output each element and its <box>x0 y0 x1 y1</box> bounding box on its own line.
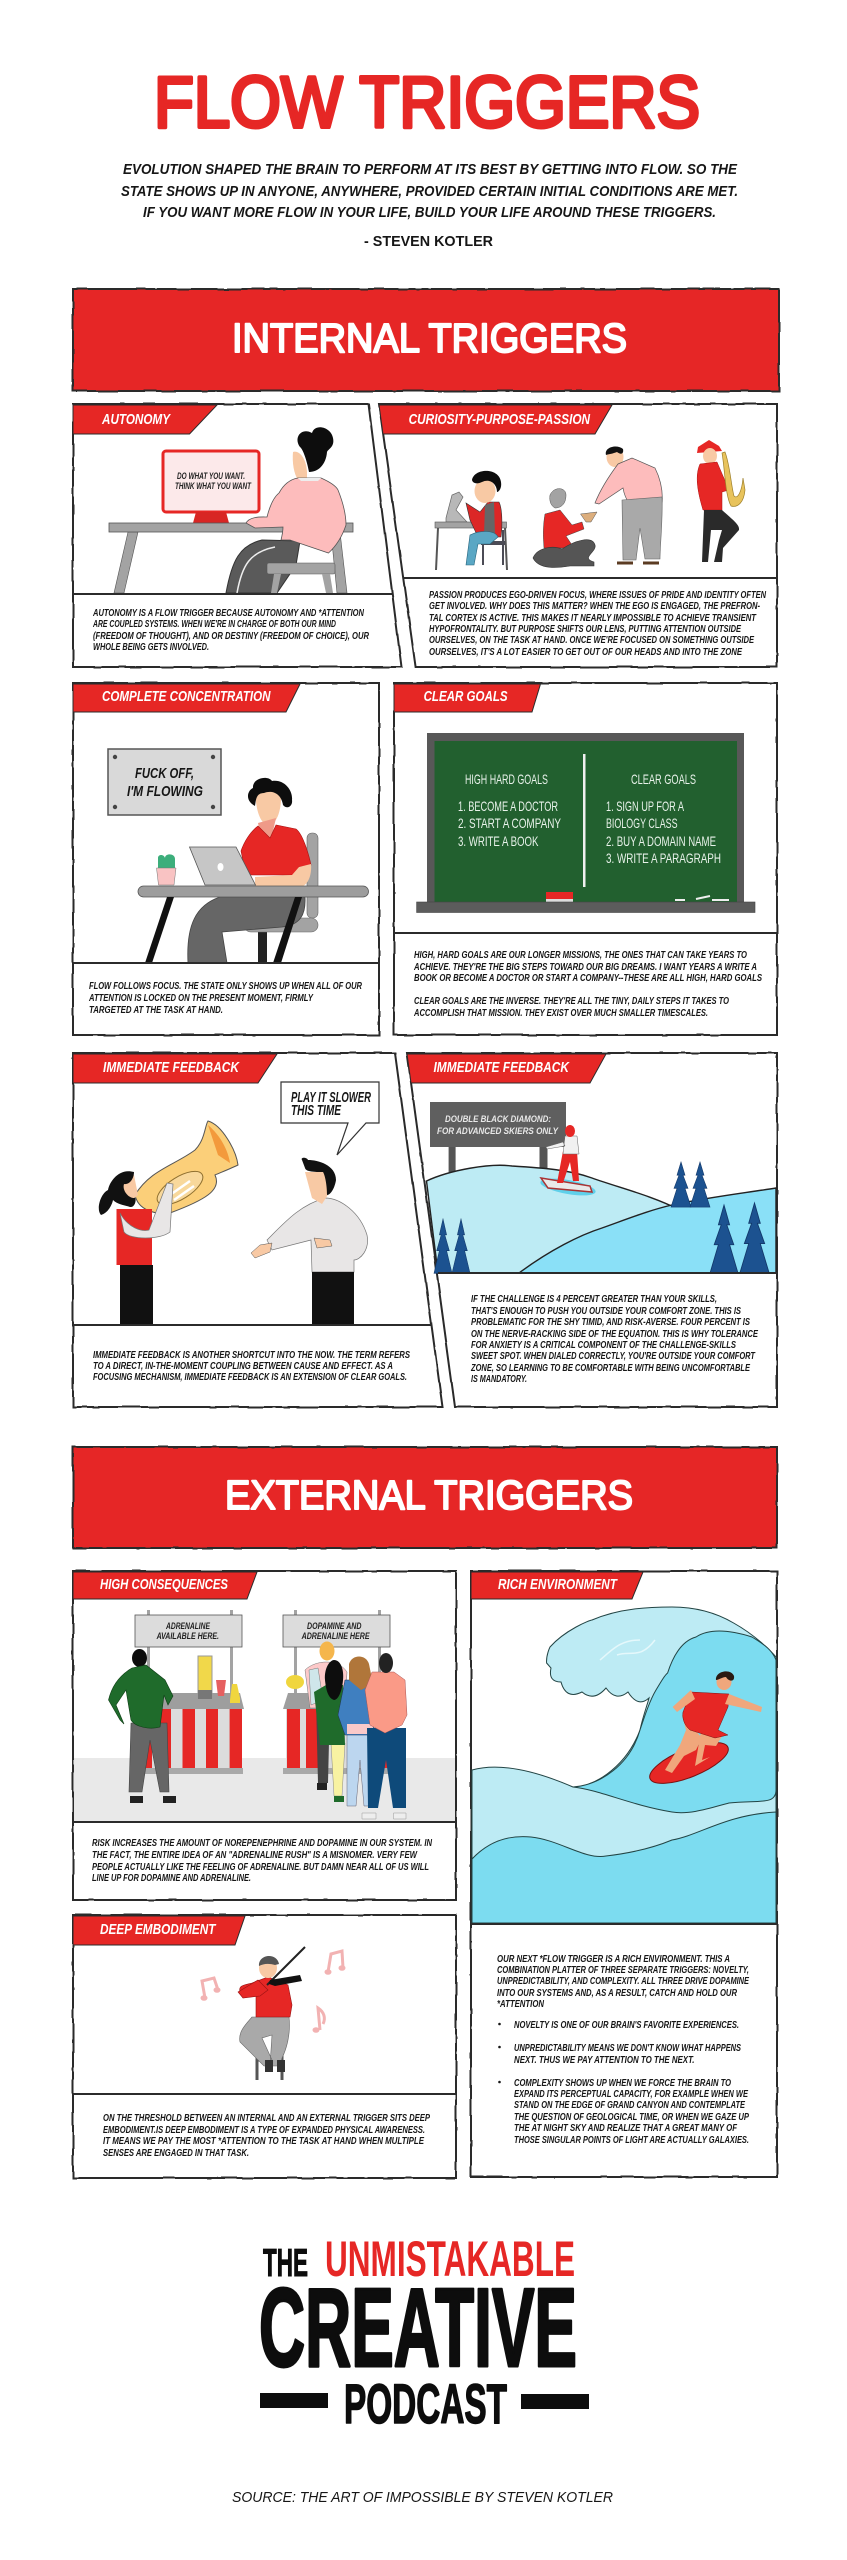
illustration: chalkboard: 3. WRITE A PARAGRAPH <box>606 850 721 866</box>
label: curiosity-purpose-passion <box>379 405 612 434</box>
panel: immediate feedback, skier <box>407 1053 777 1407</box>
text: rich environment: INTO OUR SYSTEMS AND, AS A RESULT, CATCH AND HOLD OUR <box>497 1988 737 1999</box>
panel: immediate feedback, tuba <box>73 1053 442 1407</box>
illustration: adrenaline stalls <box>74 1610 455 1822</box>
text: deep embodiment <box>103 2113 430 2159</box>
logo: the unmistakable creative podcast: PODCAST <box>344 2372 507 2435</box>
panel: deep embodiment <box>73 1915 456 2178</box>
label: rich environment <box>471 1572 643 1599</box>
illustration: chalkboard: 2. START A COMPANY <box>458 815 561 831</box>
banner: external triggers <box>73 1447 777 1548</box>
text: concentration <box>88 981 362 1016</box>
text: autonomy: (FREEDOM OF THOUGHT), AND OR DESTINY (FREEDOM OF CHOICE), OUR <box>93 631 369 642</box>
intro quote: IF YOU WANT MORE FLOW IN YOUR LIFE, BUILD YOUR LIFE AROUND THESE TRIGGERS. <box>143 205 716 221</box>
divider <box>394 932 777 934</box>
illustration: chalkboard: BIOLOGY CLASS <box>606 815 678 831</box>
illustration: adrenaline stalls: ADRENALINE HERE <box>301 1631 370 1641</box>
text: autonomy <box>92 608 369 653</box>
divider <box>73 593 392 595</box>
label: curiosity-purpose-passion: CURIOSITY-PURPOSE-PASSION <box>409 412 591 428</box>
text: rich environment: COMPLEXITY SHOWS UP WHEN WE FORCE THE BRAIN TO <box>514 2078 731 2089</box>
quote attribution: - STEVEN KOTLER <box>364 233 493 250</box>
text: challenge: IF THE CHALLENGE IS 4 PERCENT GREATER THAN YOUR SKILLS, <box>471 1294 717 1305</box>
illustration: chalkboard: CLEAR GOALS <box>631 771 696 787</box>
text: autonomy: AUTONOMY IS A FLOW TRIGGER BECAUSE AUTONOMY AND *ATTENTION <box>92 608 364 619</box>
text: deep embodiment: SENSES ARE ENGAGED IN THAT TASK. <box>103 2148 249 2159</box>
label: immediate feedback: IMMEDIATE FEEDBACK <box>434 1060 570 1076</box>
divider <box>73 1324 431 1326</box>
panel: autonomy <box>73 404 402 667</box>
divider <box>404 577 777 579</box>
text: concentration: ATTENTION IS LOCKED ON THE PRESENT MOMENT, FIRMLY <box>88 993 314 1004</box>
logo: the unmistakable creative podcast <box>259 2231 589 2435</box>
title: FLOW TRIGGERS <box>154 63 700 143</box>
text: rich environment <box>497 1954 750 2146</box>
source credit: SOURCE: THE ART OF IMPOSSIBLE BY STEVEN KOTLER <box>232 2489 613 2506</box>
illustration: adrenaline stalls: DOPAMINE AND <box>307 1621 362 1631</box>
illustration: violinist with music notes <box>200 1947 346 2080</box>
divider <box>73 1821 456 1823</box>
label: immediate feedback: IMMEDIATE FEEDBACK <box>103 1060 240 1076</box>
label: rich environment: RICH ENVIRONMENT <box>498 1577 618 1593</box>
illustration: woman at desk: DO WHAT YOU WANT. <box>177 471 245 481</box>
label: clear goals <box>394 684 540 712</box>
text: rich environment: THE AT NIGHT SKY AND REALIZE THAT A GREAT MANY OF <box>514 2123 737 2134</box>
divider <box>73 962 379 964</box>
illustration: chalkboard <box>417 733 755 912</box>
text: challenge: FOR ANXIETY IS A CRITICAL COMPONENT OF THE CHALLENGE-SKILLS <box>471 1340 736 1351</box>
illustration: chalkboard: 1. BECOME A DOCTOR <box>458 798 558 814</box>
intro quote: STATE SHOWS UP IN ANYONE, ANYWHERE, PROVIDED CERTAIN INITIAL CONDITIONS ARE MET. <box>121 184 738 200</box>
text: challenge: THAT'S ENOUGH TO PUSH YOU OUTSIDE YOUR COMFORT ZONE. THIS IS <box>471 1306 741 1317</box>
intro quote: EVOLUTION SHAPED THE BRAIN TO PERFORM AT ITS BEST BY GETTING INTO FLOW. SO THE <box>123 162 738 178</box>
illustration: woman at desk <box>109 427 353 593</box>
text: high consequences: THE FACT, THE ENTIRE IDEA OF AN "ADRENALINE RUSH" IS A MISNOMER. VERY FEW <box>92 1850 418 1861</box>
illustration: man on laptop with sign <box>108 749 368 963</box>
text: curiosity: OURSELVES, IT'S A LOT EASIER TO GET OUT OF OUR HEADS AND INTO THE ZONE <box>429 647 743 658</box>
text: clear goals <box>413 950 762 1019</box>
text: immediate feedback: FOCUSING MECHANISM, IMMEDIATE FEEDBACK IS AN EXTENSION OF CLEAR GOALS. <box>93 1372 407 1383</box>
text: rich environment: THOSE SINGULAR POINTS OF LIGHT ARE ACTUALLY GALAXIES. <box>514 2135 749 2146</box>
text: high consequences: LINE UP FOR DOPAMINE AND ADRENALINE. <box>92 1873 251 1884</box>
illustration: chalkboard: HIGH HARD GOALS <box>465 771 548 787</box>
label: deep embodiment: DEEP EMBODIMENT <box>100 1922 216 1938</box>
label: immediate feedback <box>73 1054 277 1083</box>
text: rich environment: COMBINATION PLATTER OF THREE SEPARATE TRIGGERS: NOVELTY, <box>497 1965 749 1976</box>
text: immediate feedback: IMMEDIATE FEEDBACK IS ANOTHER SHORTCUT INTO THE NOW. THE TERM REFERS <box>93 1350 410 1361</box>
text: autonomy: WHOLE BEING GETS INVOLVED. <box>93 642 209 653</box>
panel: curiosity-purpose-passion <box>379 404 777 667</box>
text: immediate feedback <box>93 1350 410 1383</box>
text: immediate feedback: TO A DIRECT, IN-THE-MOMENT COUPLING BETWEEN CAUSE AND EFFECT. AS A <box>93 1361 393 1372</box>
panel: rich environment <box>471 1571 777 2177</box>
divider <box>73 2093 456 2095</box>
illustration: teacher <box>251 1158 368 1325</box>
text: curiosity <box>429 590 766 658</box>
logo: the unmistakable creative podcast: CREATIVE <box>259 2266 577 2390</box>
label: complete concentration <box>73 684 300 712</box>
text: rich environment: EXPAND ITS PERCEPTUAL CAPACITY, FOR EXAMPLE WHEN WE <box>514 2089 749 2100</box>
illustration: chalkboard: 2. BUY A DOMAIN NAME <box>606 833 716 849</box>
illustration: snowy hills and skier: DOUBLE BLACK DIAMOND: <box>445 1114 551 1124</box>
text: rich environment: UNPREDICTABILITY, AND COMPLEXITY. ALL THREE DRIVE DOPAMINE <box>497 1976 750 1987</box>
text: challenge: IS MANDATORY. <box>471 1374 527 1385</box>
text: challenge: ZONE, SO LEARNING TO BE COMFORTABLE WITH BEING UNCOMFORTABLE <box>470 1363 751 1374</box>
text: deep embodiment: EMBODIMENT.IS DEEP EMBODIMENT IS A TYPE OF EXPANDED PHYSICAL AWARENESS. <box>103 2125 425 2136</box>
text: deep embodiment: ON THE THRESHOLD BETWEEN AN INTERNAL AND AN EXTERNAL TRIGGER SITS DEEP <box>103 2113 430 2124</box>
label: high consequences: HIGH CONSEQUENCES <box>100 1577 228 1593</box>
illustration: adrenaline stalls: AVAILABLE HERE. <box>156 1631 219 1641</box>
panel: clear goals <box>394 683 777 1035</box>
illustration: chalkboard: 1. SIGN UP FOR A <box>606 798 684 814</box>
text: challenge <box>470 1294 759 1385</box>
panel: high consequences <box>73 1571 456 1900</box>
banner: internal triggers <box>73 289 779 391</box>
illustration: tuba player <box>99 1121 238 1325</box>
intro quote <box>121 162 738 221</box>
label: complete concentration: COMPLETE CONCENTRATION <box>102 689 271 705</box>
text: high consequences: RISK INCREASES THE AMOUNT OF NOREPENEPHRINE AND DOPAMINE IN OUR SYSTEM. IN <box>92 1838 432 1849</box>
logo: the unmistakable creative podcast: THE <box>263 2242 308 2285</box>
text: concentration: FLOW FOLLOWS FOCUS. THE STATE ONLY SHOWS UP WHEN ALL OF OUR <box>89 981 362 992</box>
text: deep embodiment: IT MEANS WE PAY THE MOST *ATTENTION TO THE TASK AT HAND WHEN MULTIPLE <box>103 2136 425 2147</box>
illustration: woman at desk: THINK WHAT YOU WANT <box>175 481 252 491</box>
illustration: queue of people <box>108 1642 407 1819</box>
illustration: snowy hills and skier <box>426 1102 776 1273</box>
text: high consequences <box>92 1838 432 1884</box>
logo: the unmistakable creative podcast: UNMISTAKABLE <box>325 2231 575 2287</box>
text: rich environment: THE QUESTION OF GEOLOGICAL TIME, OR WHEN WE GAZE UP <box>514 2112 749 2123</box>
label: immediate feedback <box>407 1054 606 1083</box>
text: clear goals: CLEAR GOALS ARE THE INVERSE. THEY'RE ALL THE TINY, DAILY STEPS IT TAKES TO <box>414 996 729 1007</box>
illustration: man on laptop with sign: I'M FLOWING <box>127 784 203 800</box>
label: autonomy: AUTONOMY <box>101 412 171 428</box>
speech bubble: THIS TIME <box>291 1103 342 1119</box>
label: autonomy <box>73 405 217 434</box>
banner: internal triggers: INTERNAL TRIGGERS <box>232 315 627 361</box>
illustration: adrenaline stalls: ADRENALINE <box>165 1621 211 1631</box>
label: high consequences <box>73 1572 257 1599</box>
text: rich environment: STAND ON THE EDGE OF GRAND CANYON AND CONTEMPLATE <box>514 2100 746 2111</box>
speech bubble <box>281 1082 379 1155</box>
panel: complete concentration <box>73 683 379 1035</box>
text: concentration: TARGETED AT THE TASK AT HAND. <box>89 1005 223 1016</box>
label: deep embodiment <box>73 1916 245 1945</box>
divider <box>438 1272 777 1274</box>
illustration: snowy hills and skier: FOR ADVANCED SKIERS ONLY <box>437 1126 559 1136</box>
banner: external triggers: EXTERNAL TRIGGERS <box>225 1472 633 1518</box>
text: rich environment: NEXT. THUS WE PAY ATTENTION TO THE NEXT. <box>514 2055 694 2066</box>
label: clear goals: CLEAR GOALS <box>424 689 508 705</box>
text: autonomy: ARE COUPLED SYSTEMS. WHEN WE'RE IN CHARGE OF BOTH OUR MIND <box>92 619 336 630</box>
illustration: scientist, giver, saxophonist <box>435 440 745 570</box>
text: rich environment: OUR NEXT *FLOW TRIGGER IS A RICH ENVIRONMENT. THIS A <box>497 1954 730 1965</box>
illustration: man on laptop with sign: FUCK OFF, <box>135 766 194 782</box>
text: challenge: PROBLEMATIC FOR THE SHY TIMID, AND RISK-AVERSE. FOUR PERCENT IS <box>471 1317 750 1328</box>
speech bubble: PLAY IT SLOWER <box>291 1090 371 1106</box>
divider <box>471 1923 777 1925</box>
illustration: wave and surfer <box>472 1607 776 1924</box>
text: rich environment: *ATTENTION <box>497 1999 544 2010</box>
text: clear goals: ACCOMPLISH THAT MISSION. THEY EXIST OVER MUCH SMALLER TIMESCALES. <box>413 1008 708 1019</box>
illustration: chalkboard: 3. WRITE A BOOK <box>458 833 539 849</box>
text: high consequences: PEOPLE ACTUALLY LIKE THE FEELING OF ADRENALINE. BUT DAMN NEAR ALL OF US WILL <box>92 1862 429 1873</box>
text: rich environment: UNPREDICTABILITY MEANS WE DON'T KNOW WHAT HAPPENS <box>514 2043 741 2054</box>
text: rich environment: NOVELTY IS ONE OF OUR BRAIN'S FAVORITE EXPERIENCES. <box>514 2020 739 2031</box>
